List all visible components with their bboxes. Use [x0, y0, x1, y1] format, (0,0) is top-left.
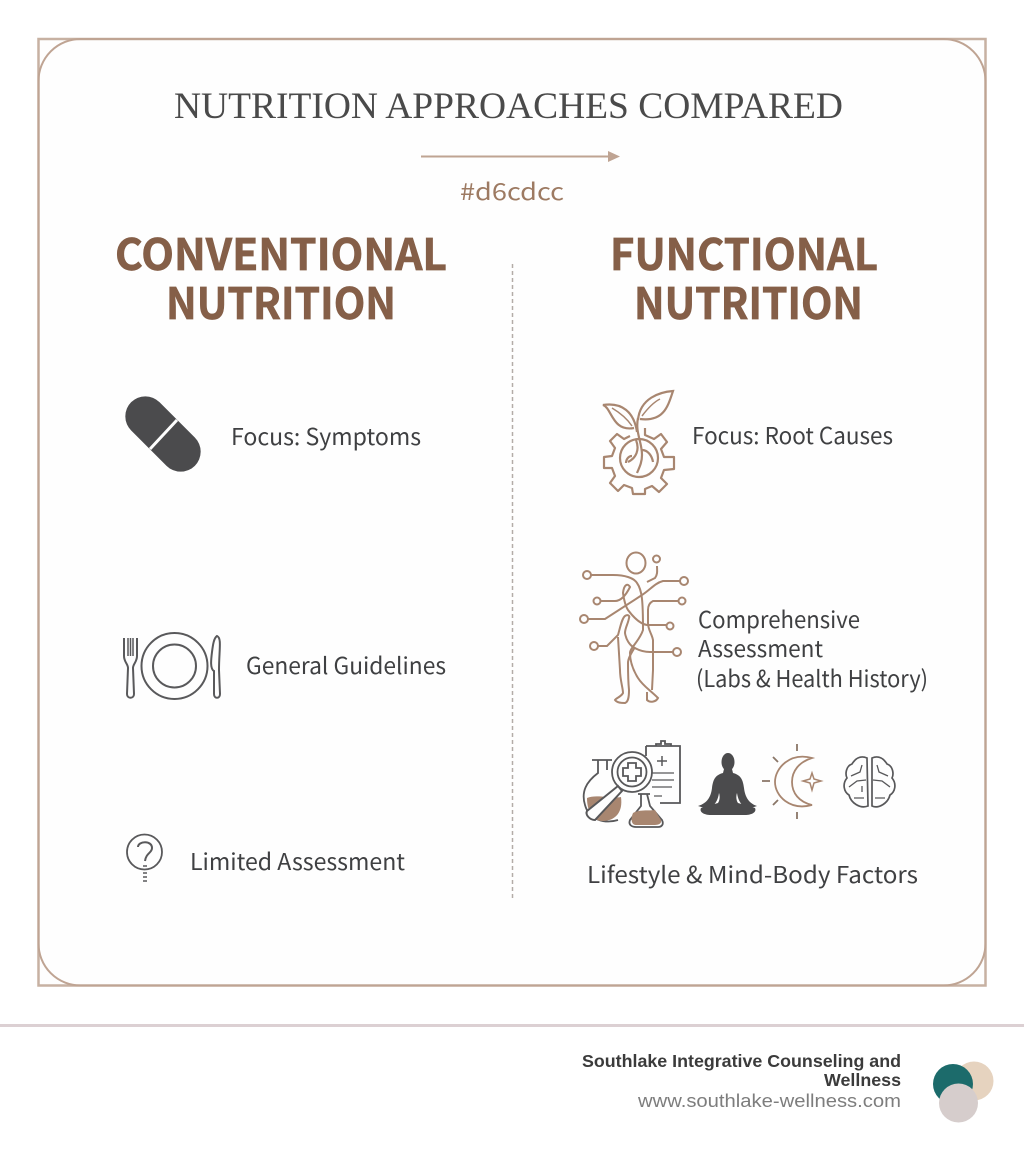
text: general guidelines: General Guidelines [246, 647, 446, 681]
footer: organisation name and url: www.southlake-wellness.com [637, 1090, 901, 1111]
heading: functional nutrition: FUNCTIONAL [610, 221, 878, 283]
icon: plant in gear [603, 391, 674, 494]
text: focus symptoms: Focus: Symptoms [231, 418, 421, 452]
text: comprehensive assessment: Comprehensive [698, 601, 860, 635]
footer: organisation name and url: Wellness [824, 1070, 901, 1090]
icon: meditating figure [698, 753, 757, 815]
heading: functional nutrition: NUTRITION [634, 270, 863, 332]
icon: question mark [127, 834, 162, 881]
icon: plate and cutlery [124, 633, 220, 699]
colour label: #d6cdcc [460, 173, 564, 207]
text: comprehensive assessment: Assessment [698, 630, 823, 664]
icon: brain [844, 757, 895, 807]
heading: functional nutrition [610, 221, 878, 332]
panel: comparison frame [38, 39, 986, 986]
icon: pill [117, 388, 209, 480]
text: comprehensive assessment: (Labs & Health History) [696, 660, 928, 694]
footer: organisation name and url [582, 1051, 901, 1111]
logo: three circles [933, 1062, 994, 1122]
icon: flasks, magnifier and clipboard [584, 741, 680, 827]
text: comprehensive assessment [696, 601, 928, 694]
text: limited assessment: Limited Assessment [190, 843, 405, 877]
heading: conventional nutrition: CONVENTIONAL [115, 221, 447, 283]
arrow [421, 151, 620, 162]
text: lifestyle and mind-body factors: Lifestyle & Mind-Body Factors [587, 856, 918, 890]
heading: conventional nutrition: NUTRITION [166, 270, 396, 332]
heading: conventional nutrition [115, 221, 447, 332]
footer: organisation name and url: Southlake Integrative Counseling and [582, 1051, 901, 1071]
icon: body with connected nodes [580, 552, 688, 703]
text: focus root causes: Focus: Root Causes [692, 417, 893, 451]
icon: moon and sparkle [762, 744, 821, 819]
title: NUTRITION APPROACHES COMPARED [174, 86, 843, 127]
